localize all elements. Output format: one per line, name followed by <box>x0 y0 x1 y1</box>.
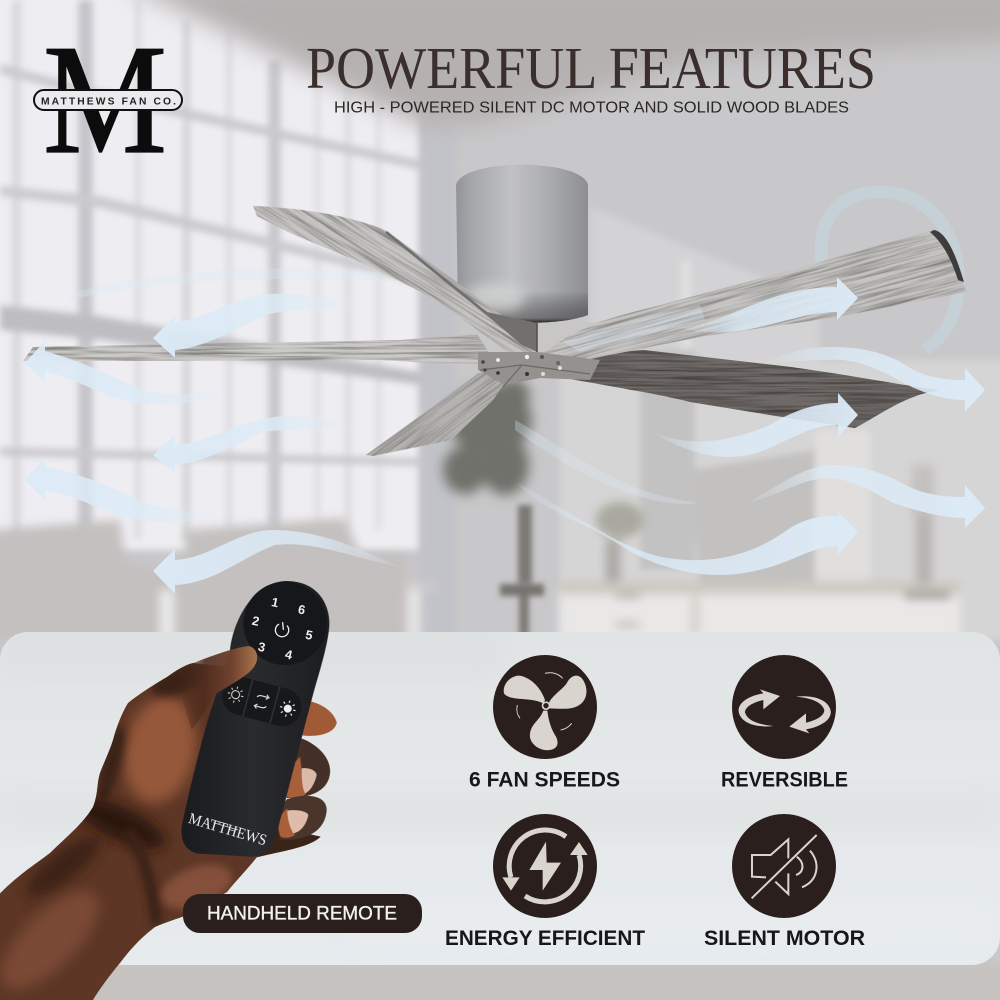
logo: Matthews Fan Co. monogram: MATTHEWS FAN CO. <box>41 96 176 107</box>
fingers <box>257 701 337 857</box>
thumb <box>177 646 257 730</box>
speed dial <box>243 582 327 665</box>
arrow right 1 <box>676 277 858 332</box>
under ring finger shadow <box>257 827 321 857</box>
arrow right 5 <box>747 465 985 528</box>
ceiling shadow <box>117 0 1000 125</box>
speed dial: 3 <box>257 640 267 655</box>
dark edge of upper-left blade <box>385 231 537 352</box>
index finger <box>300 701 337 736</box>
decorative vases on console <box>596 465 950 598</box>
icon: reverse arrows <box>739 689 831 733</box>
feature: silent motor <box>704 814 865 950</box>
icon: lightning bolt cycle <box>502 830 588 902</box>
speed dial: 6 <box>297 602 307 618</box>
title: POWERFUL FEATURES <box>306 36 876 102</box>
blade end cap <box>930 230 964 282</box>
ceiling fan <box>23 78 999 527</box>
arrow left 2 <box>25 341 217 404</box>
arrow right 3 <box>517 483 858 575</box>
logo: Matthews Fan Co. monogram: M <box>43 12 167 186</box>
arrow left 1 <box>153 294 350 358</box>
fan blade: lower right dark <box>538 350 940 428</box>
arrow left 5 <box>153 530 400 594</box>
feature: 6 fan speeds: 6 FAN SPEEDS <box>469 768 620 792</box>
translucent bottom panel <box>0 632 1000 965</box>
hand holding remote <box>0 581 337 1000</box>
arrow right 4 <box>767 347 985 412</box>
hand and arm <box>0 658 273 1000</box>
speed dial: 4 <box>284 647 294 663</box>
feature: reversible <box>721 655 848 792</box>
ring finger <box>278 796 327 840</box>
canopy motor housing <box>456 165 588 323</box>
faint arrow trails <box>70 269 705 504</box>
middle finger <box>286 738 330 798</box>
airflow arrows <box>25 269 985 594</box>
label pill: handheld remote: HANDHELD REMOTE <box>207 904 397 924</box>
fan blade: lower left <box>324 297 557 527</box>
subtitle: HIGH - POWERED SILENT DC MOTOR AND SOLID WOOD BLADES <box>334 100 849 116</box>
remote control body <box>181 581 329 857</box>
icon: fan <box>504 673 586 750</box>
hub with screws <box>478 322 600 387</box>
fan blade: upper left <box>182 78 609 493</box>
speed dial: 1 <box>270 595 280 610</box>
arrow right 2 <box>650 393 858 457</box>
speed dial: 2 <box>251 614 261 629</box>
potted plant behind the fan <box>443 379 532 495</box>
feature: energy efficient: ENERGY EFFICIENT <box>445 927 645 950</box>
airflow swirl ring at right <box>821 192 958 350</box>
feature: reversible: REVERSIBLE <box>721 768 848 792</box>
speed dial: 5 <box>304 628 314 643</box>
label pill: handheld remote <box>183 894 422 933</box>
feature: 6 fan speeds <box>469 655 620 792</box>
feature: silent motor: SILENT MOTOR <box>704 927 865 950</box>
fan blade: left <box>23 334 520 368</box>
feature: energy efficient <box>445 814 645 950</box>
remote brand name: MATTHEWS <box>187 810 269 849</box>
fan blade: upper right <box>505 123 999 469</box>
function buttons <box>218 673 305 730</box>
arrow left 4 <box>25 457 213 522</box>
arrow left 3 <box>153 416 347 473</box>
icon: muted speaker <box>752 835 817 898</box>
